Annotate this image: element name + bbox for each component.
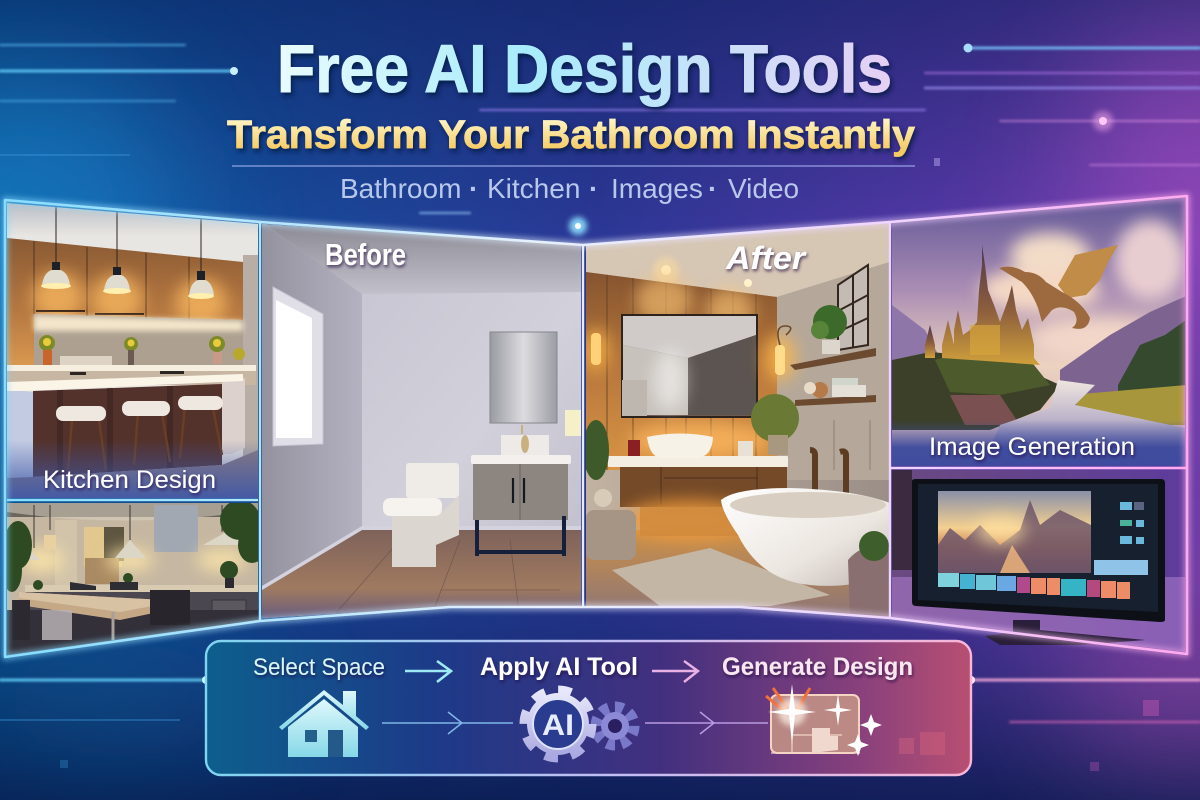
glowing frame	[5, 196, 1187, 657]
window lattice	[838, 265, 868, 350]
vanity	[608, 434, 788, 540]
monitor body	[912, 479, 1165, 622]
label: after: After	[725, 240, 807, 276]
icon: house	[279, 690, 369, 757]
river	[980, 380, 1185, 470]
plants	[39, 335, 245, 366]
toilet	[383, 463, 459, 567]
pot	[848, 531, 890, 618]
arrow: lower 1	[382, 712, 513, 734]
ceiling	[262, 222, 582, 294]
categories line: ·	[589, 173, 598, 204]
kitchen cabinets	[7, 238, 243, 365]
faucet	[810, 450, 846, 495]
step: select space: Select Space	[253, 654, 385, 681]
lamp glow	[17, 505, 248, 574]
mirror	[490, 332, 557, 423]
window	[273, 287, 323, 446]
label: kitchen design: Kitchen Design	[43, 466, 216, 494]
decorative squares	[899, 732, 945, 755]
icon: ai gears	[525, 691, 633, 757]
rug	[612, 548, 830, 606]
lower counter	[7, 585, 258, 660]
step: apply ai tool: Apply AI Tool	[480, 653, 638, 681]
vanity	[471, 455, 571, 556]
floor	[262, 530, 582, 620]
categories line: Bathroom	[340, 173, 461, 204]
arrow: lower 2	[645, 712, 768, 734]
categories line: Video	[728, 173, 799, 204]
kitchen side wall	[243, 255, 258, 456]
right wall	[777, 262, 890, 480]
title: Free AI Design Tools	[277, 31, 892, 107]
panel: before bathroom	[262, 222, 582, 622]
floor	[7, 450, 258, 498]
categories line: Kitchen	[487, 173, 580, 204]
panel: image generation	[892, 195, 1186, 470]
mirror	[622, 315, 757, 417]
wood wall	[586, 272, 777, 470]
side controls	[1094, 502, 1148, 575]
process box	[206, 641, 971, 775]
floor	[586, 530, 850, 614]
clouds	[980, 220, 1185, 362]
counter	[7, 365, 256, 371]
dragon	[999, 245, 1118, 329]
bathtub	[721, 488, 895, 586]
step: generate design: Generate Design	[722, 653, 913, 681]
left wall	[262, 222, 362, 590]
label: image generation: Image Generation	[929, 433, 1135, 461]
castle	[925, 245, 1040, 365]
icon: generate sparkle	[766, 684, 882, 756]
planters	[583, 394, 799, 560]
panel: after bathroom	[582, 222, 895, 622]
panel: video monitor	[892, 468, 1186, 658]
island	[7, 374, 245, 478]
monitor stand	[985, 620, 1145, 645]
panel: lower kitchen	[2, 500, 266, 660]
mountains	[892, 296, 1186, 410]
categories line: ·	[469, 173, 478, 204]
ground	[892, 352, 1186, 430]
shelves	[790, 305, 876, 406]
categories line: ·	[708, 173, 717, 204]
label: before: Before	[325, 237, 406, 272]
wall units	[55, 505, 198, 586]
timeline clips	[938, 573, 1130, 599]
arrow: step 1 to 2	[405, 661, 451, 682]
categories line: Images	[611, 173, 703, 204]
arrow: step 2 to 3	[652, 661, 698, 682]
sparkle rays	[766, 688, 810, 716]
panel: kitchen design	[7, 200, 259, 500]
sconces	[582, 326, 796, 382]
pendant lamps	[41, 205, 214, 299]
video preview	[938, 491, 1091, 573]
towel	[565, 410, 581, 436]
subtitle: Transform Your Bathroom Instantly	[227, 113, 916, 157]
plants left and right	[2, 500, 266, 592]
icon: ai gears: AI	[542, 709, 574, 742]
sink	[501, 425, 549, 455]
table and chairs	[12, 582, 190, 640]
ceiling	[586, 222, 890, 297]
backsplash	[34, 314, 243, 366]
stools	[56, 396, 223, 470]
